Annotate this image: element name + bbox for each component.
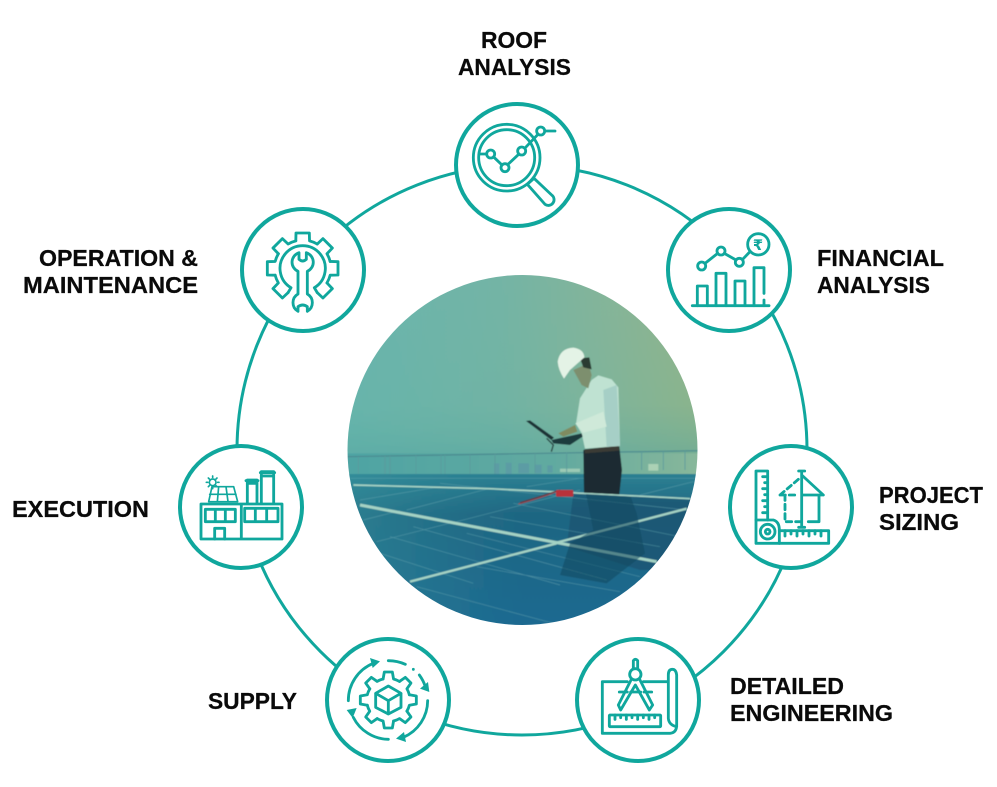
laptop	[526, 420, 554, 440]
distant buildings	[496, 463, 659, 474]
label: ENGINEERING	[730, 700, 893, 726]
icon: rulers and house plan	[756, 471, 829, 543]
icon: bar chart with rupee	[692, 234, 769, 306]
white panel frames	[353, 485, 690, 582]
icon badge	[327, 639, 449, 761]
icon badge	[730, 446, 852, 568]
shaded right panels	[568, 494, 690, 570]
icon: bar chart with rupee: ₹	[753, 237, 763, 254]
hand	[558, 425, 577, 437]
solar panels	[349, 474, 696, 625]
label	[817, 245, 944, 298]
label: OPERATION &	[39, 245, 198, 271]
icon: gear with wrench	[267, 233, 338, 311]
icon: gear, cube and cycle arrows	[347, 658, 429, 742]
shirt	[576, 375, 620, 449]
icon: factory with solar panel	[201, 472, 282, 539]
belt	[584, 446, 619, 453]
label: MAINTENANCE	[23, 272, 198, 298]
label	[23, 245, 198, 298]
label: DETAILED	[730, 673, 844, 699]
trousers	[583, 447, 622, 494]
label	[730, 673, 893, 726]
icon badge	[577, 639, 699, 761]
label: ROOF	[481, 27, 547, 53]
step: operation and maintenance	[23, 209, 364, 331]
step: financial analysis	[668, 209, 944, 331]
railing	[348, 450, 698, 473]
neck and head	[573, 363, 592, 388]
horizon band	[340, 453, 705, 477]
thin panel grid	[350, 478, 698, 623]
label: FINANCIAL	[817, 245, 944, 271]
label	[879, 482, 983, 535]
reflection of engineer	[560, 494, 645, 583]
engineer	[526, 348, 622, 494]
sky	[348, 275, 698, 454]
icon badge	[242, 209, 364, 331]
label: PROJECT	[879, 482, 983, 508]
label: SIZING	[879, 509, 959, 535]
icon badge	[180, 446, 302, 568]
icon: blueprint, compass and ruler	[602, 659, 677, 733]
process ring	[237, 165, 807, 735]
label: SUPPLY	[208, 688, 297, 714]
forearm	[575, 412, 607, 433]
step: project sizing	[730, 446, 983, 568]
hair	[580, 357, 592, 369]
step: roof analysis	[456, 27, 578, 226]
test meter and leads	[518, 490, 573, 504]
label: EXECUTION	[12, 496, 149, 522]
label: ANALYSIS	[458, 54, 571, 80]
step: detailed engineering	[577, 639, 893, 761]
icon badge	[668, 209, 790, 331]
icon: magnifier with line chart	[473, 124, 555, 205]
step: execution	[12, 446, 302, 568]
icon badge	[456, 104, 578, 226]
helmet	[558, 348, 584, 379]
central photo: engineer on solar roof	[340, 270, 705, 635]
step: supply	[208, 639, 449, 761]
label: ANALYSIS	[817, 272, 930, 298]
label	[458, 27, 571, 80]
